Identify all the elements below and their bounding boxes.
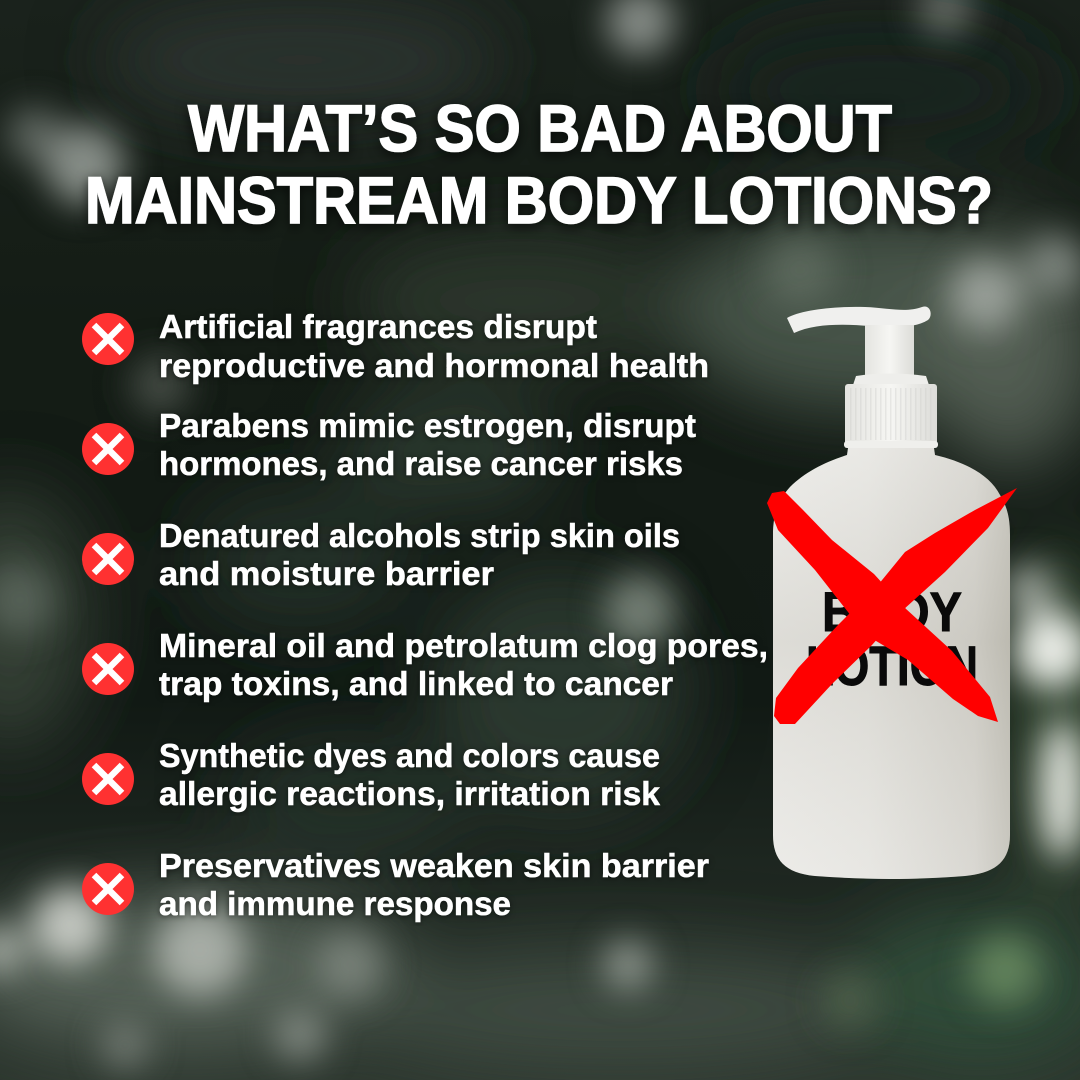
item: denatured alcohols	[82, 517, 680, 592]
icon: white lotion pump bottle	[773, 307, 1010, 879]
item: parabens: hormones, and raise cancer risks	[159, 445, 683, 482]
item: artificial fragrances: Artificial fragrances disrupt	[159, 308, 597, 345]
icon: red painted cross over bottle	[767, 488, 1017, 724]
item: synthetic dyes: Synthetic dyes and colors cause	[159, 737, 660, 774]
item: synthetic dyes: allergic reactions, irritation risk	[159, 775, 661, 812]
item: artificial fragrances	[82, 308, 709, 384]
title: MAINSTREAM BODY LOTIONS?	[85, 163, 993, 237]
item: synthetic dyes	[82, 737, 661, 812]
bottle label	[806, 580, 978, 697]
item: mineral oil: Mineral oil and petrolatum clog pores,	[159, 627, 768, 664]
item: preservatives: and immune response	[159, 885, 511, 922]
title	[85, 91, 993, 237]
item: preservatives	[82, 847, 709, 922]
bottle label: BODY	[822, 580, 962, 643]
item: denatured alcohols: Denatured alcohols strip skin oils	[159, 517, 680, 554]
item: parabens: Parabens mimic estrogen, disrupt	[159, 407, 696, 444]
title: WHAT’S SO BAD ABOUT	[188, 91, 892, 165]
list of lotion problems	[82, 308, 768, 922]
item: artificial fragrances: reproductive and hormonal health	[159, 347, 709, 384]
bottle label: LOTION	[806, 634, 978, 697]
item: mineral oil: trap toxins, and linked to cancer	[159, 665, 673, 702]
item: mineral oil	[82, 627, 768, 702]
item: parabens	[82, 407, 696, 482]
item: preservatives: Preservatives weaken skin barrier	[159, 847, 709, 884]
item: denatured alcohols: and moisture barrier	[159, 555, 494, 592]
